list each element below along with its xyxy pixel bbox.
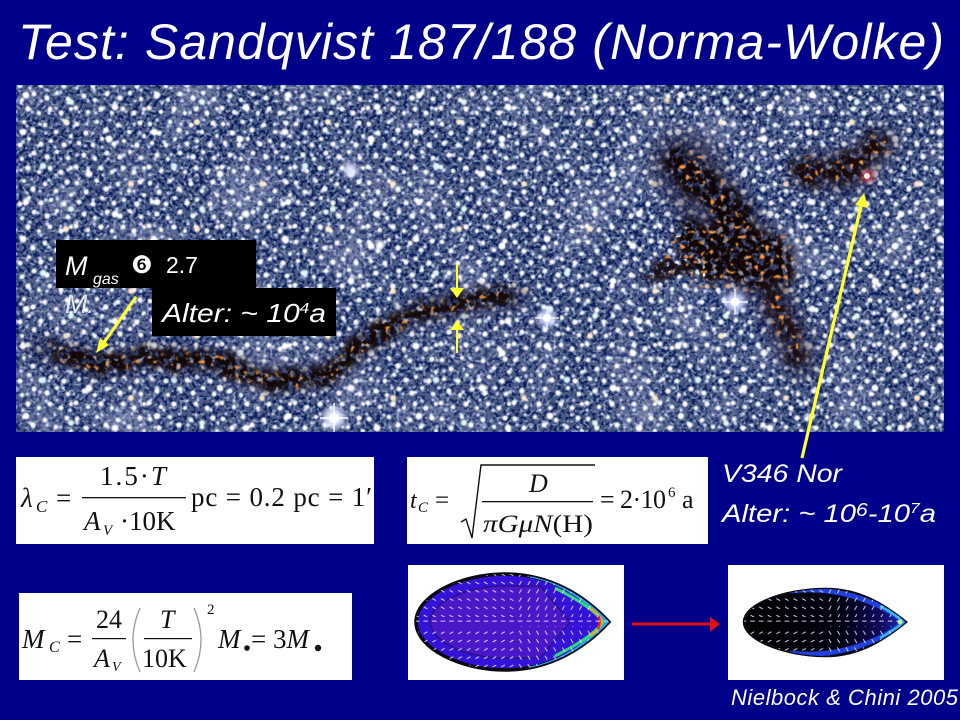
formula: collapse time: 6 <box>668 485 676 501</box>
formula: critical mass: = 3M <box>251 624 310 654</box>
formula: critical mass: M <box>21 624 46 654</box>
dark cloud: V346 Nor region <box>650 145 875 355</box>
formula: critical wavelength: ·10K <box>120 506 176 536</box>
formula: critical mass: 24 <box>96 605 122 634</box>
formula: collapse time: πGμN (H) <box>483 511 593 538</box>
label: V346 Nor age: 6 <box>856 500 869 520</box>
label: gas mass box <box>56 240 256 288</box>
formula: collapse time: a <box>682 485 694 514</box>
formula: critical mass: 2 <box>207 602 214 618</box>
label: age of filament: a <box>309 298 326 328</box>
formula: critical wavelength: C <box>36 497 48 516</box>
formula: collapse time <box>407 457 708 544</box>
formula: critical mass: = <box>67 624 82 654</box>
formula: critical mass: C <box>49 639 60 656</box>
label: V346 Nor age: -10 <box>868 500 910 528</box>
formula: critical wavelength: λ <box>20 483 33 513</box>
label: V346 Nor age <box>720 460 936 528</box>
formula: collapse time: = 2·10 <box>600 485 666 514</box>
arrow: to filament core <box>96 297 136 353</box>
label: gas mass box: gas <box>93 271 119 288</box>
formula: critical wavelength: V <box>103 523 114 539</box>
embedded orange stars <box>56 134 894 392</box>
citation: Nielbock & Chini 2005 <box>731 685 959 710</box>
formula: critical mass <box>19 593 352 680</box>
formula: critical wavelength <box>16 457 374 544</box>
arrow: evolution <box>632 617 720 632</box>
panel: simulation before <box>408 565 624 680</box>
formula: critical mass: A <box>92 644 110 673</box>
title: Test: Sandqvist 187/188 (Norma-Wolke) <box>18 14 944 70</box>
label: gas mass box: ❻ <box>131 251 153 279</box>
arrow: width marker from above <box>450 264 464 298</box>
formula: collapse time: C <box>418 500 429 516</box>
formula: critical mass: V <box>112 660 122 675</box>
formula: critical wavelength: = <box>56 483 71 513</box>
arrow: width marker from below <box>450 320 464 353</box>
label: age of filament <box>152 288 336 336</box>
formula: critical mass: M <box>217 624 242 654</box>
label: V346 Nor age: Alter: ~ 10 <box>722 500 837 528</box>
dark halo around clouds <box>40 145 880 380</box>
formula: critical mass: T <box>160 605 176 634</box>
label: solar mass overflow text: M. <box>65 289 94 319</box>
formula: collapse time: t <box>410 488 418 514</box>
label: V346 Nor age: 7 <box>910 500 921 517</box>
formula: collapse time: = <box>435 487 449 514</box>
formula: collapse time: D <box>528 469 548 498</box>
dark cloud: Sandqvist filament <box>60 296 505 380</box>
label: V346 Nor age: a <box>920 500 936 528</box>
panel: star field image with dark clouds <box>16 85 944 432</box>
formula: critical wavelength: A <box>82 506 101 536</box>
label: age of filament: 4 <box>300 300 309 317</box>
label: V346 Nor age: V346 Nor <box>722 460 844 488</box>
formula: critical mass: 10K <box>142 644 187 673</box>
label: gas mass box: 2.7 <box>166 252 198 278</box>
formula: critical wavelength: 1.5·T <box>100 461 168 491</box>
formula: critical wavelength: pc = 0.2 pc = 1′ <box>191 482 372 512</box>
label: gas mass box: M <box>65 251 88 281</box>
arrow: to V346 Nor <box>802 193 868 458</box>
label: age of filament: Alter: ~ 10 <box>162 298 281 328</box>
bright stars <box>320 97 899 432</box>
panel: simulation after <box>728 565 944 680</box>
